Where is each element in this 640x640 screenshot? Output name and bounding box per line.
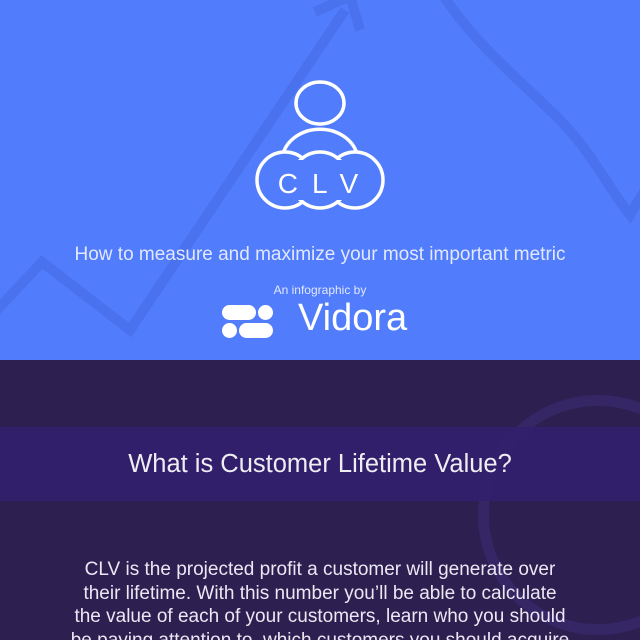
hero panel — [0, 0, 640, 360]
background curve line — [440, 0, 640, 215]
subtitle: How to measure and maximize your most important metric — [74, 244, 566, 265]
heading band — [0, 427, 640, 501]
body text: CLV is the projected profit a customer will generate over — [85, 559, 555, 580]
body text: the value of each of your customers, learn who you should — [74, 606, 566, 627]
body text — [71, 559, 569, 640]
panel: what is CLV — [0, 360, 640, 640]
decorative ring — [478, 395, 640, 635]
icon: CLV person — [257, 82, 383, 208]
byline: An infographic by — [274, 283, 366, 297]
logo: Vidora — [222, 297, 408, 339]
body text: their lifetime. With this number you’ll be able to calculate — [83, 582, 557, 604]
icon: CLV person: CLV — [278, 168, 372, 199]
background arrow line — [0, 0, 360, 330]
logo: Vidora: Vidora — [298, 297, 407, 339]
heading band: What is Customer Lifetime Value? — [128, 450, 512, 478]
